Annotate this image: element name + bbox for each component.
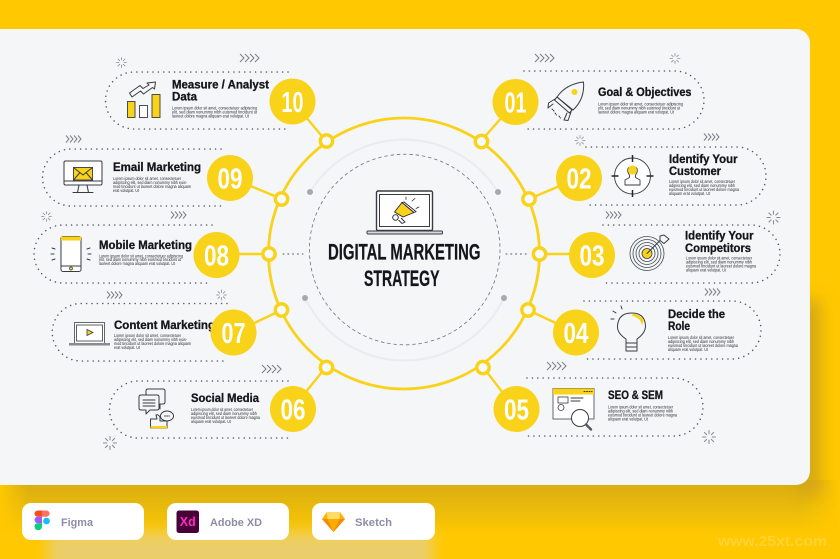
body text: laoreet dolore magna aliquam erat volutpat. Ut [172,114,250,118]
body text: aliquam erat volutpat. Ut [608,416,649,422]
icon: rocket [548,82,584,120]
body text: erat volutpat. Ut [114,345,141,350]
heading: SEO & SEM [608,388,663,402]
body text: Lorem ipsum dolor sit amet, consectetuer adipiscing [598,102,684,106]
body text: Lorem ipsum dolor sit amet, consectetuer adipiscing [172,106,258,110]
dotted centre links [283,253,527,255]
icon: monitor with envelope [64,161,102,192]
body text: aliquam erat volutpat. Ut [669,191,711,196]
body text: adipiscing elit, sed diam nonummy nibh [669,183,736,188]
heading: Email Marketing [113,160,201,174]
sparkle [104,436,116,450]
body text [172,106,258,118]
sparkle [702,430,716,444]
heading: Measure / Analyst [172,78,269,92]
panel: 08 mobile marketing [34,212,212,283]
icon: xd logo: Xd [180,515,196,529]
button: sketch [312,503,435,540]
body text: Lorem ipsum dolor sit amet, consectetuer [668,335,734,340]
panel: 04 decide the role: Role [668,319,690,333]
number badges: 04 [564,318,588,350]
body text [669,179,740,196]
title: DIGITAL MARKETING [328,240,480,264]
body text: Lorem ipsum dolor sit amet, consectetuer [191,407,253,412]
icon: laptop with megaphone [367,191,442,234]
icon: sketch diamond [322,512,345,532]
dotted outline [42,149,221,206]
number badges: 01 [504,88,526,120]
dotted outline [34,225,212,283]
body text: Lorem ipsum dolor sit amet, consectetuer [608,404,673,410]
chevrons [547,362,566,370]
body text: adipiscing elit, sed diam nonummy nibh [191,411,258,416]
heading: Decide the [668,307,725,321]
chevrons [606,212,621,218]
number badges: 02 [566,164,592,196]
number badges: 07 [222,318,246,350]
body text: euismod tincidunt ut laoreet dolore magna [608,412,678,418]
main card [0,29,810,485]
body text [686,256,757,272]
sparkle [116,58,126,68]
panel: 05 seo and sem [527,362,716,444]
body text: euismod tincidunt ut laoreet dolore magna [191,415,261,420]
chevrons [66,136,81,142]
heading: Mobile Marketing [99,238,192,252]
panel: 03 identify your competitors [603,211,780,283]
body text: adipiscing elit, sed diam nonummy nibh euis- [113,180,187,185]
body text: adipiscing elit, sed diam nonummy nibh euis- [114,337,187,342]
body text: mod tincidunt ut laoreet dolore magna aliquam [113,184,191,189]
heading: Social Media [191,391,259,405]
body text: Lorem ipsum dolor sit amet, consectetuer adipiscing [99,254,184,258]
dotted outline [52,304,228,361]
label: Figma [61,517,94,529]
body text: erat volutpat. Ut [113,188,140,193]
body text [113,176,191,193]
button haze [48,532,433,559]
body text: elit, sed diam nonummy nibh euismod tincidunt ut [172,110,258,114]
body text: mod tincidunt ut laoreet dolore magna aliquam [114,341,191,346]
icon: browser with magnifier [553,388,594,430]
panel: 06 social media [104,365,288,450]
number badges [194,78,615,432]
body text: adipiscing elit, sed diam nonummy nibh [608,408,674,414]
number badges: 05 [504,394,529,426]
icon: customer crosshair [612,155,654,197]
title: STRATEGY [364,266,440,291]
button: adobe xd [167,503,289,540]
panel: 02 identify your customer [575,134,766,205]
central ring diagram [235,116,574,393]
heading: Content Marketing [114,318,215,332]
body text: elit, sed diam nonummy nibh euismod tincidunt ut [598,106,681,110]
dotted outline [527,378,703,436]
body text [114,333,191,350]
chevrons [171,212,186,218]
sparkle [42,212,52,222]
body text: euismod tincidunt ut laoreet dolore magna [669,187,740,192]
panel: 07 content marketing [52,290,228,361]
panel: 03 identify your competitors: Competitors [685,241,751,255]
number badges: 03 [580,240,604,272]
body text [668,335,739,352]
body text [191,407,261,424]
sparkle [670,54,680,64]
body text: adipiscing elit, sed diam nonummy nibh [668,339,735,344]
number badges: 10 [282,87,304,119]
icon: bar chart [128,82,160,118]
sparkle [767,211,780,224]
card shadow [0,300,840,534]
grey dots [302,189,507,301]
icon: light bulb [611,306,646,351]
heading: Identify Your [669,152,738,166]
number badges: 06 [280,394,306,426]
chevrons [240,54,259,62]
body text: Lorem ipsum dolor sit amet, consectetuer [686,256,752,260]
panel: 10 measure analyst data: Data [172,90,197,104]
number badges: 09 [218,164,242,196]
icon: target with dart [630,235,669,270]
chevrons [704,134,719,140]
chevrons [705,288,720,296]
body text: Lorem ipsum dolor sit amet, consectetuer [114,333,181,338]
watermark: www.25xt.com [717,533,827,550]
button: figma [22,503,144,540]
body text: Lorem ipsum dolor sit amet, consectetuer [669,179,735,184]
heading: Goal & Objectives [598,85,692,99]
icon: figma logo [34,510,50,530]
ring nodes [263,135,546,374]
body text [608,404,678,422]
body text: adipiscing elit, sed diam nonummy nibh [686,260,753,264]
connector lines [235,116,574,393]
heading: Identify Your [685,228,754,242]
panel: 02 identify your customer: Customer [669,164,721,178]
chevrons [262,365,281,373]
label: Sketch [355,517,392,529]
body text [598,102,684,114]
panel: 01 goal and objectives [524,54,704,129]
chevrons [107,292,122,298]
panel: 10 measure analyst data [106,54,288,129]
panel: 09 email marketing [42,136,221,206]
sparkle [216,290,226,300]
panel: 04 decide the role [584,288,761,359]
icon: chat bubbles and thumb [139,389,174,428]
icon: smartphone [51,236,91,272]
icon: laptop with play [69,322,110,346]
chevrons [535,54,554,62]
dotted outline [524,71,704,129]
dotted outline [603,225,780,283]
label: Adobe XD [210,517,262,529]
dotted outline [584,301,761,359]
body text: laoreet dolore magna aliquam erat volutpat. Ut [598,110,675,114]
inner grey arcs [305,140,504,360]
dotted outline [586,147,766,205]
body text: euismod tincidunt ut laoreet dolore magna [686,264,757,268]
body text: aliquam erat volutpat. Ut [686,268,727,272]
sparkle [575,136,585,146]
body text: aliquam erat volutpat. Ut [668,347,709,352]
body text: elit, sed diam nonummy nibh euismod tincidunt ut [99,257,182,262]
number badges: 08 [204,240,229,272]
outer yellow ring [268,118,540,389]
dashed inner circle [309,154,500,345]
dotted outline [110,381,288,438]
title [328,240,480,291]
body text [99,254,184,266]
body text: Lorem ipsum dolor sit amet, consectetuer [113,176,181,181]
body text: euismod tincidunt ut laoreet dolore magna [668,343,739,348]
body text: laoreet dolore magna aliquam erat volutpat. Ut [99,261,176,266]
dotted outline [106,72,288,129]
body text: aliquam erat volutpat. Ut [191,419,232,424]
